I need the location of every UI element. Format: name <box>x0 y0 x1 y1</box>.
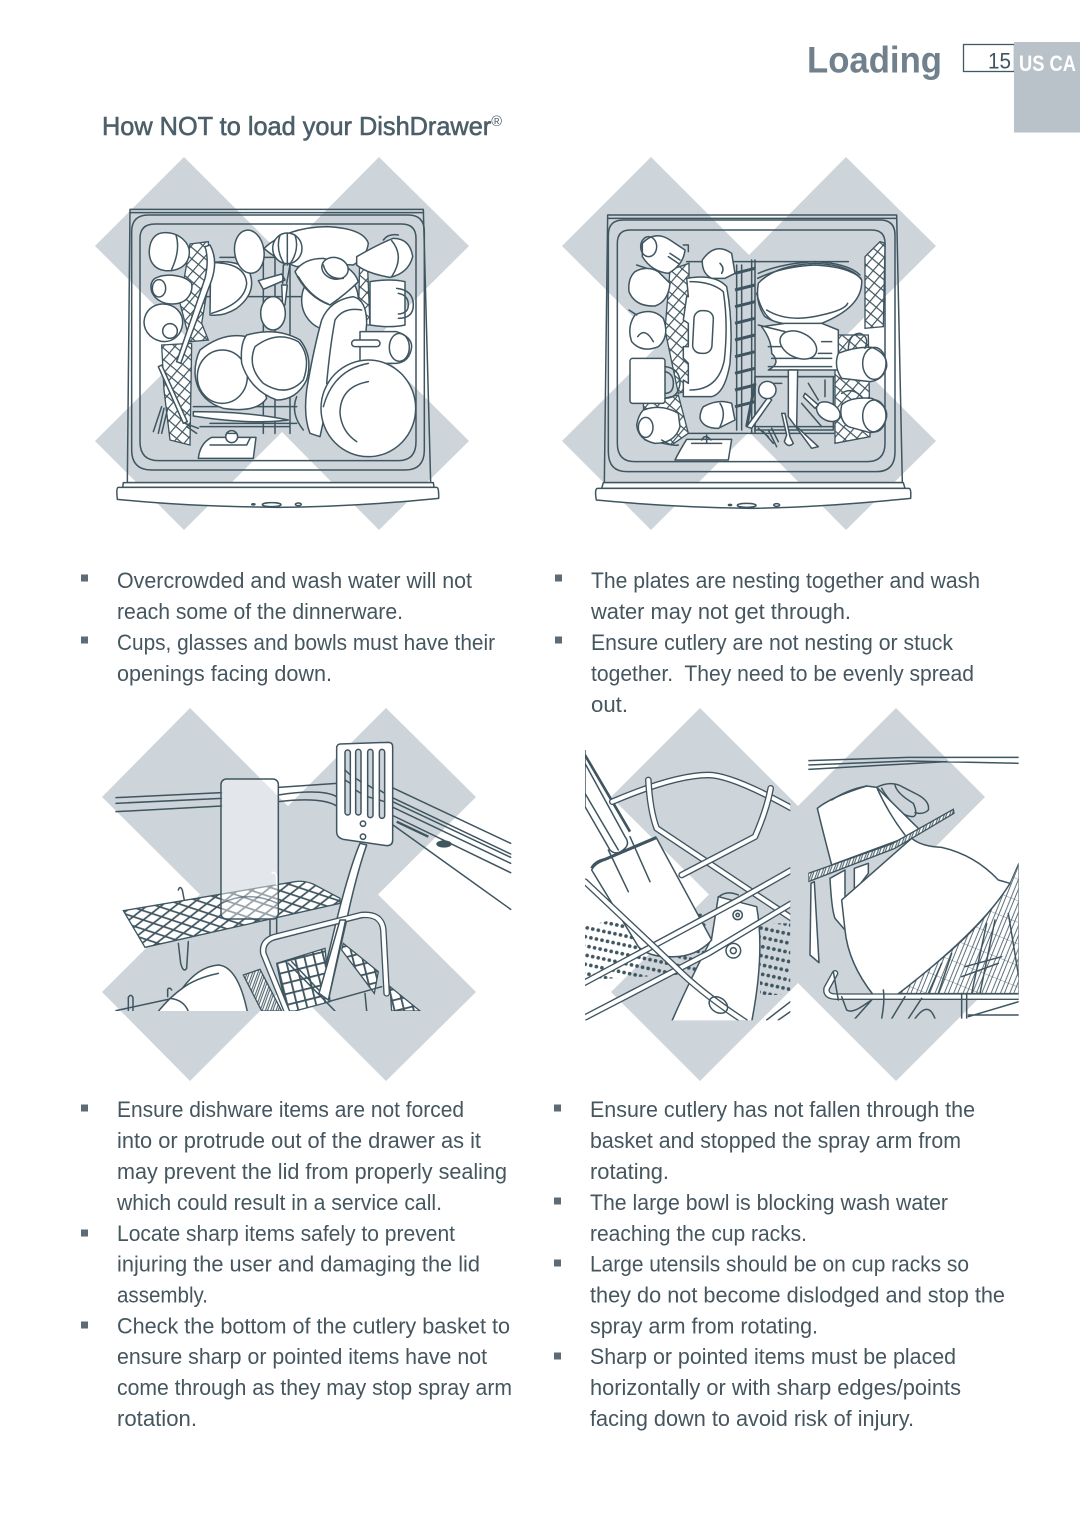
panel: nesting plates drawer illustration <box>562 157 936 530</box>
text block: nesting plates notes <box>555 568 980 717</box>
bullet: sharp points <box>554 1344 961 1431</box>
shelf <box>178 887 188 970</box>
page title: ® <box>491 113 502 130</box>
left cups <box>149 233 189 271</box>
rack wires <box>687 260 848 433</box>
bullet: basket bottom <box>81 1314 512 1431</box>
bullet: sharp items <box>81 1221 480 1308</box>
shelf <box>808 809 954 882</box>
long pan handle <box>306 297 367 437</box>
serving dish <box>683 277 731 397</box>
bullet: cutlery fallen: basket and stopped the spray arm from <box>590 1128 961 1153</box>
rack hatch <box>895 863 1019 993</box>
region tab: US CA <box>1014 42 1080 132</box>
small cups <box>702 249 735 278</box>
bullet: basket bottom: rotation. <box>117 1406 197 1431</box>
bullet: overcrowded: Overcrowded and wash water will not <box>117 568 472 593</box>
bullet: not forced: which could result in a service call. <box>116 1190 442 1215</box>
text block: fallen cutlery notes <box>554 1097 1005 1431</box>
bullet: sharp points: facing down to avoid risk of injury. <box>590 1406 914 1431</box>
bullet: large bowl: The large bowl is blocking wash water <box>590 1190 948 1215</box>
bullet: cutlery nesting: out. <box>591 692 628 717</box>
page number box <box>964 44 1014 74</box>
bullet: sharp points: horizontally or with sharp edges/points <box>590 1375 961 1400</box>
bullet: large bowl <box>554 1190 948 1246</box>
lattice <box>665 263 689 393</box>
icon: X mark <box>611 708 985 1081</box>
bullet: large bowl: reaching the cup racks. <box>590 1221 807 1246</box>
bullet: overcrowded <box>81 568 472 624</box>
left cups <box>642 236 685 273</box>
bowl top <box>264 227 368 267</box>
icon: X mark <box>102 708 476 1081</box>
drawer line drawing with overcrowded dishes <box>117 209 439 507</box>
bowl <box>842 838 1010 995</box>
large plate <box>321 360 416 457</box>
icon: X mark <box>562 157 936 530</box>
rails <box>808 757 1019 769</box>
bullet: basket bottom: Check the bottom of the cutlery basket to <box>117 1314 510 1338</box>
bullet: sharp items: Locate sharp items safely to prevent <box>117 1221 455 1246</box>
bullet: cups facing down: Cups, glasses and bowls must have their <box>117 630 495 655</box>
bullet: not forced: Ensure dishware items are not forced <box>117 1097 464 1122</box>
drawer line drawing with nested plates <box>596 215 911 508</box>
cutlery and fork <box>177 245 215 363</box>
page title: How NOT to load your DishDrawer <box>102 111 502 141</box>
comb tines <box>735 268 755 427</box>
plate back <box>210 262 252 315</box>
prongs under shelf <box>810 882 819 963</box>
bullet: large utensils <box>554 1252 1005 1338</box>
bullet: large utensils: they do not become dislodged and stop the <box>590 1282 1005 1308</box>
section heading: Loading: Loading <box>807 40 942 80</box>
middle plates <box>195 336 267 410</box>
cutlery basket <box>277 948 330 1011</box>
panel: fallen cutlery illustration <box>583 708 1019 1081</box>
text block: forced items notes <box>81 1097 512 1431</box>
bullet: plates nesting: The plates are nesting together and wash <box>591 568 980 593</box>
spatula <box>326 842 368 996</box>
cup <box>877 784 929 813</box>
bullet: cutlery nesting <box>555 630 974 717</box>
bullet: cutlery fallen: Ensure cutlery has not fallen through the <box>590 1097 975 1122</box>
text block: overcrowded drawer notes <box>81 568 495 686</box>
right cups <box>836 347 887 382</box>
fallen spatula close-up line drawing <box>583 750 792 1022</box>
plates <box>757 263 862 325</box>
spoons <box>232 228 267 275</box>
spatula <box>592 838 712 957</box>
wire basket <box>826 973 1019 997</box>
panel: overcrowded drawer illustration <box>95 157 469 530</box>
rack lattice <box>180 242 210 342</box>
right cups <box>357 238 413 277</box>
bullet: cups facing down: openings facing down. <box>117 661 332 686</box>
panel: protruding items illustration <box>102 708 511 1081</box>
bullet: cutlery fallen: rotating. <box>590 1159 669 1184</box>
pot lid and pot <box>302 270 358 330</box>
spray arm hub <box>675 439 732 460</box>
wires <box>612 775 792 808</box>
bullet: overcrowded: reach some of the dinnerware. <box>117 599 403 624</box>
bullet: not forced: into or protrude out of the drawer as it <box>117 1128 481 1153</box>
bullet: large utensils: Large utensils should be on cup racks so <box>590 1252 969 1276</box>
bullet: plates nesting: water may not get through. <box>590 599 851 624</box>
bullet: cutlery nesting: together. They need to be evenly spread <box>591 661 974 686</box>
large bowl blocking cup rack line drawing <box>808 757 1019 1019</box>
whisk <box>273 233 302 264</box>
icon: X mark <box>95 157 469 530</box>
right basket cutlery <box>755 377 833 430</box>
rails <box>116 783 337 812</box>
bowl and wire <box>115 987 172 1011</box>
bullet: large utensils: spray arm from rotating. <box>590 1314 818 1338</box>
bullet: sharp items: assembly. <box>117 1282 208 1308</box>
bullet: cutlery fallen <box>554 1097 975 1184</box>
glass, spatula and cutlery basket line drawing <box>116 742 511 1013</box>
page number box: 15 <box>988 48 1011 74</box>
bullet: sharp points: Sharp or pointed items must be placed <box>590 1344 956 1369</box>
bullet: not forced <box>81 1097 507 1215</box>
bullet: basket bottom: ensure sharp or pointed items have not <box>117 1344 487 1369</box>
bullet: plates nesting <box>555 568 980 624</box>
bullet: sharp items: injuring the user and damaging the lid <box>117 1252 480 1276</box>
bullet: cups facing down <box>81 630 495 686</box>
glass <box>221 779 278 919</box>
spray arm hub <box>198 437 256 458</box>
bullet: cutlery nesting: Ensure cutlery are not nesting or stuck <box>591 630 954 655</box>
bullet: not forced: may prevent the lid from properly sealing <box>117 1159 507 1184</box>
bullet: basket bottom: come through as they may stop spray arm <box>117 1375 512 1400</box>
